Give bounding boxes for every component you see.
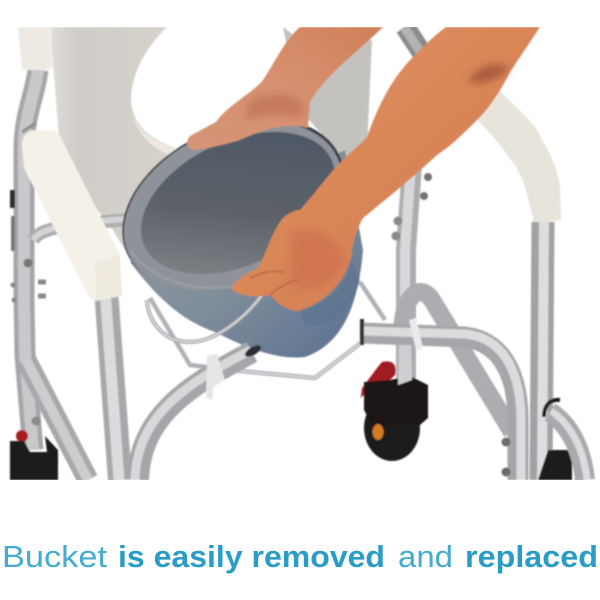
caption: replaced: replaced	[465, 539, 598, 574]
chair and bucket photo	[10, 27, 587, 480]
caption: and: and	[398, 539, 453, 574]
left hand and arm	[187, 27, 383, 150]
centre support tube	[105, 290, 120, 480]
caption	[2, 539, 598, 574]
elbow crease	[468, 65, 510, 83]
left armrest	[22, 123, 122, 301]
bucket	[121, 125, 364, 358]
left frame bolts	[10, 190, 46, 426]
top left handle	[18, 27, 52, 70]
bucket interior	[140, 131, 335, 274]
lower right skin reflection on bucket	[300, 262, 360, 326]
tube clip	[409, 318, 423, 350]
right support tube	[541, 222, 544, 480]
front right footrest tube	[360, 319, 521, 480]
right small tube and wheel	[538, 400, 587, 480]
caption: is easily removed: is easily removed	[118, 539, 385, 574]
caster wheel	[360, 345, 428, 461]
left tube clip	[206, 354, 225, 400]
front left footrest tube	[135, 343, 263, 480]
right inner frame tube	[392, 165, 432, 385]
bucket handle	[147, 295, 262, 342]
bucket body	[130, 150, 363, 358]
bucket rim	[121, 126, 342, 272]
diagonal right tube	[402, 292, 512, 432]
caption: Bucket: Bucket	[2, 539, 107, 574]
rear right frame tube	[404, 27, 428, 62]
finger creases	[250, 271, 298, 295]
left frame tube	[24, 70, 125, 480]
hand shading	[290, 229, 345, 290]
chair backrest	[50, 27, 372, 250]
left hand shadow	[245, 95, 305, 120]
right armrest	[477, 88, 561, 224]
right hand and arm	[232, 27, 540, 311]
wire bucket support	[150, 282, 385, 378]
left caster	[10, 430, 58, 480]
